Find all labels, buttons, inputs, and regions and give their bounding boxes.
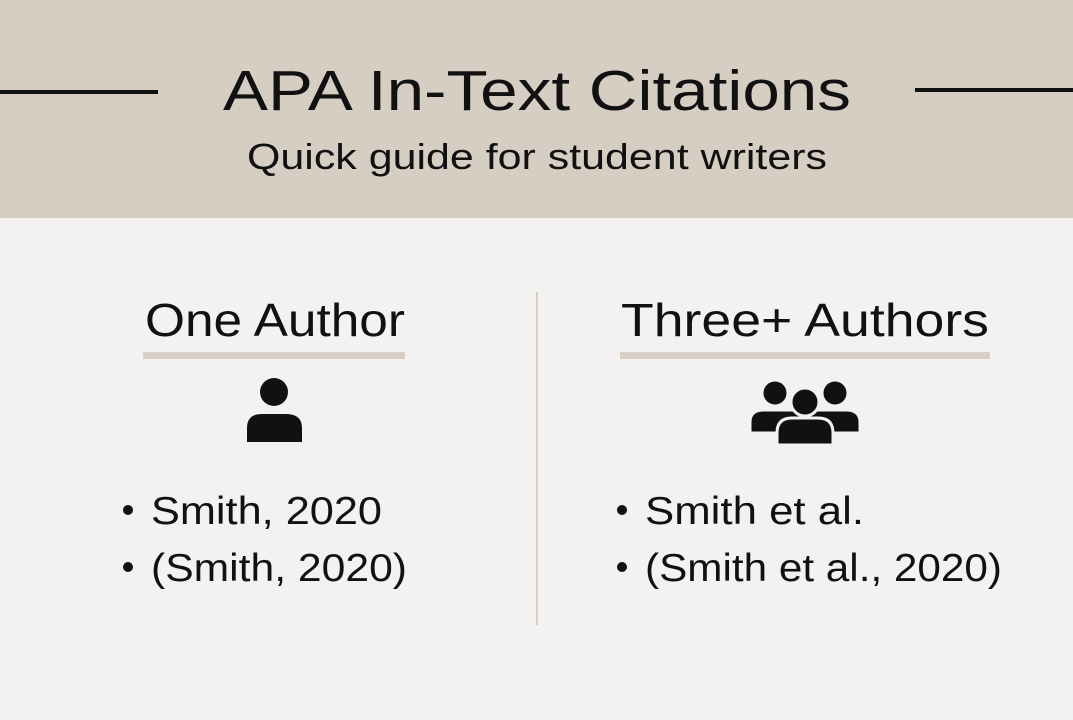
subtitle: Quick guide for student writers bbox=[247, 136, 827, 177]
icon: group bbox=[750, 380, 860, 445]
bullet list: three+ authors bbox=[617, 490, 1002, 590]
bullet list: one author: (Smith, 2020) bbox=[151, 547, 407, 590]
bullet list: three+ authors: Smith et al. bbox=[645, 490, 864, 533]
icon: person bbox=[247, 378, 302, 442]
panel: three+ authors bbox=[617, 294, 1002, 590]
panel: one author bbox=[123, 294, 407, 590]
bullet list: one author bbox=[123, 490, 407, 590]
bullet list: one author: Smith, 2020 bbox=[151, 490, 382, 533]
heading: three+ authors: Three+ Authors bbox=[621, 294, 989, 346]
header band bbox=[0, 0, 1073, 218]
divider bbox=[536, 292, 538, 625]
title: APA In-Text Citations bbox=[223, 59, 851, 123]
heading: one author: One Author bbox=[145, 294, 405, 346]
bullet list: three+ authors: (Smith et al., 2020) bbox=[645, 547, 1002, 590]
